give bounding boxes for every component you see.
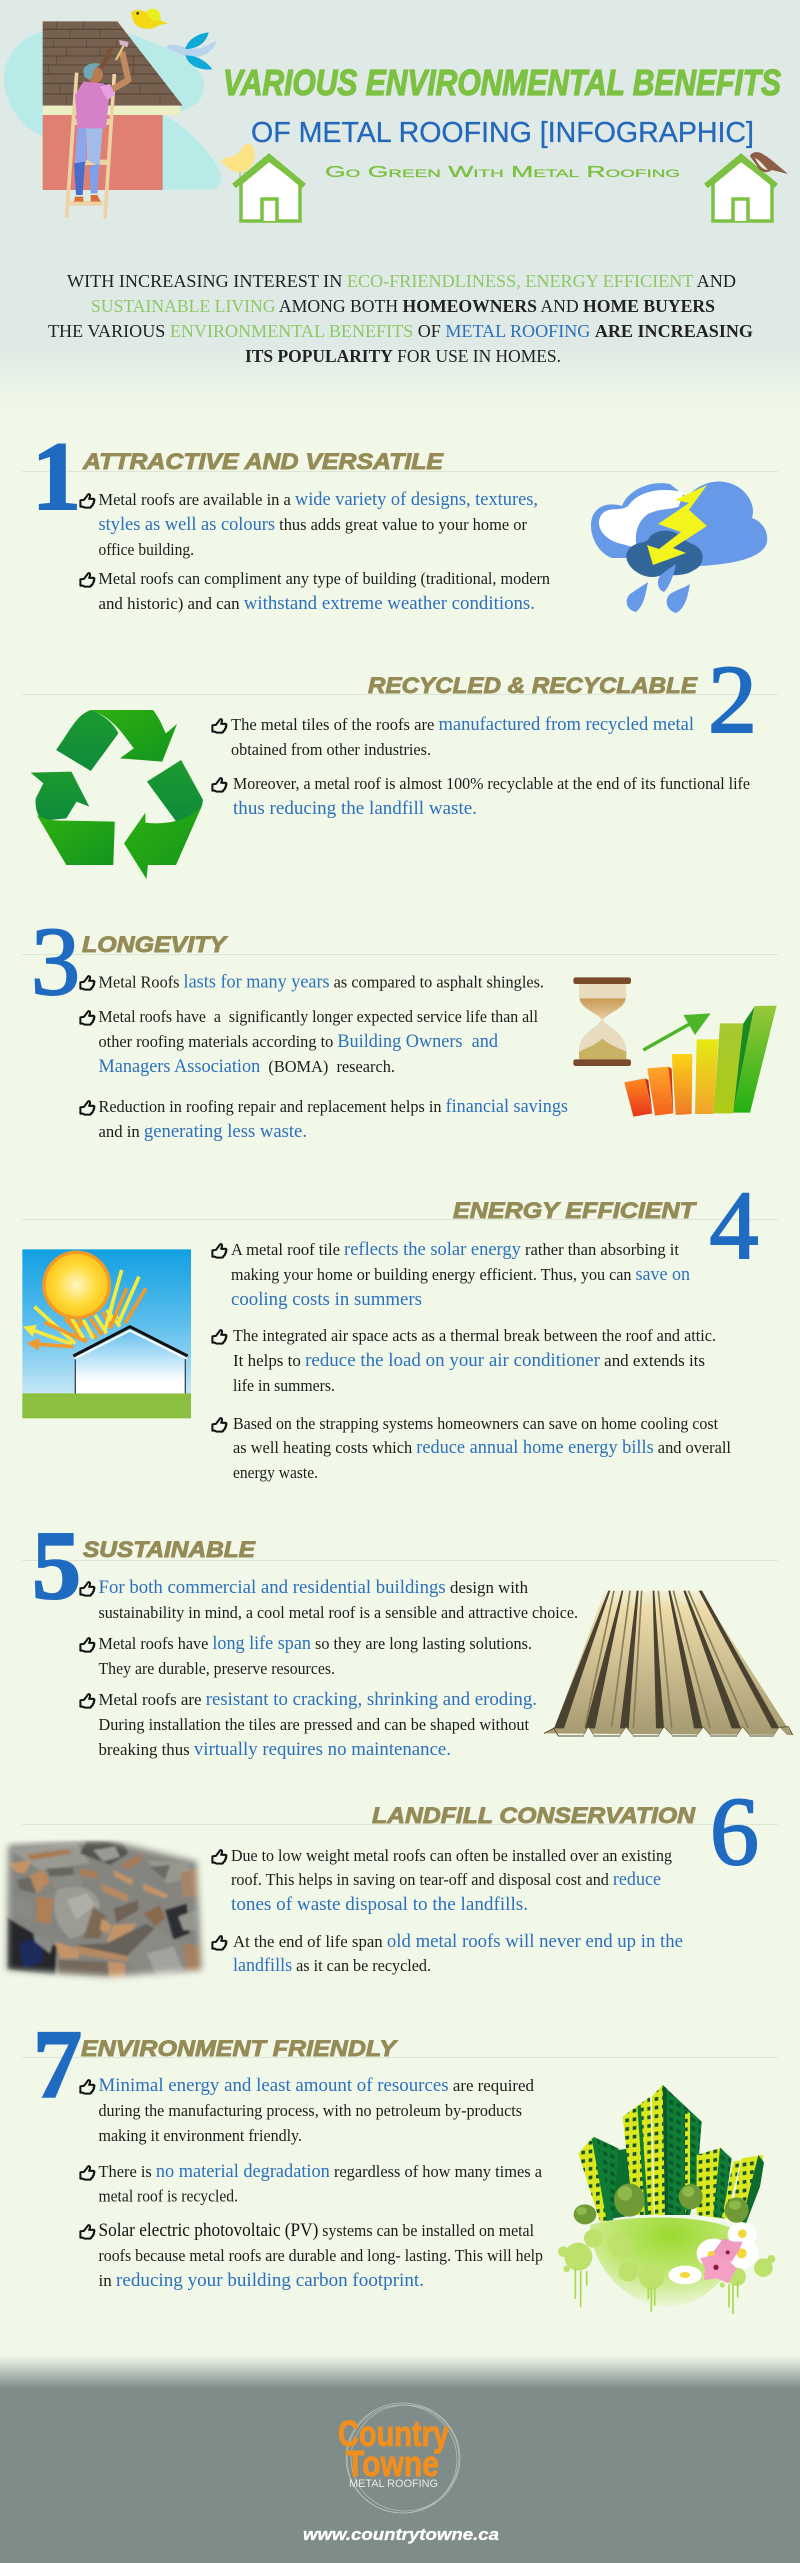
bullet point: roof. This helps in saving on tear-off and disposal cost and reduce <box>231 1869 661 1890</box>
bullet point <box>80 1096 568 1142</box>
bullet point: landfills as it can be recycled. <box>233 1955 431 1976</box>
bullet point: Metal roofs are available in a wide variety of designs, textures, <box>98 489 538 510</box>
icon: sun reflecting off house roof <box>22 1249 191 1418</box>
bullet point <box>212 1414 731 1482</box>
icon: blue bird <box>167 32 217 70</box>
number 2: 2 <box>708 646 757 754</box>
bullet point: Metal Roofs lasts for many years as compared to asphalt shingles. <box>98 972 544 992</box>
icon: recycling arrows <box>31 710 203 879</box>
heading: RECYCLED & RECYCLABLE <box>368 673 698 698</box>
bullet point: Moreover, a metal roof is almost 100% recyclable at the end of its functional life <box>233 774 750 793</box>
bullet point: Solar electric photovoltaic (PV) systems can be installed on metal <box>98 2221 534 2241</box>
icon: yellow bird <box>131 9 168 29</box>
bullet point: For both commercial and residential buildings design with <box>98 1577 528 1598</box>
bullet point: obtained from other industries. <box>231 740 431 759</box>
image: corrugated metal roof sheet <box>544 1591 793 1736</box>
bullet point: Managers Association (BOMA) research. <box>98 1056 395 1077</box>
subtitle: OF METAL ROOFING [INFOGRAPHIC] <box>251 117 754 149</box>
number 7: 7 <box>33 2011 82 2119</box>
bullet point <box>212 1931 683 1976</box>
logo: Country Towne Metal Roofing: Towne <box>346 2443 439 2484</box>
intro text: SUSTAINABLE LIVING AMONG BOTH HOMEOWNERS AND HOME BUYERS <box>91 296 715 316</box>
panel: section 4 energy efficient <box>22 1172 778 1482</box>
logo: Country Towne Metal Roofing: Country <box>338 2413 449 2454</box>
intro text: WITH INCREASING INTEREST IN ECO-FRIENDLINESS, ENERGY EFFICIENT AND <box>67 271 736 291</box>
heading: SUSTAINABLE <box>83 1537 256 1562</box>
panel: section 1 attractive and versatile <box>22 423 778 614</box>
bullet point <box>212 1239 690 1310</box>
bullet point: At the end of life span old metal roofs will never end up in the <box>233 1931 683 1952</box>
heading: LANDFILL CONSERVATION <box>372 1803 696 1828</box>
bullet point: thus reducing the landfill waste. <box>233 798 477 819</box>
bullet point: life in summers. <box>233 1376 335 1395</box>
bullet point: Metal roofs can compliment any type of building (traditional, modern <box>98 569 550 588</box>
bullet point: and in generating less waste. <box>98 1121 307 1142</box>
panel: section 5 sustainable <box>22 1512 793 1760</box>
bullet point: roofs because metal roofs are durable and long- lasting. This will help <box>98 2246 543 2265</box>
bullet point <box>212 1846 672 1915</box>
panel: section 2 recycled and recyclable <box>22 646 778 879</box>
number 3: 3 <box>31 908 80 1016</box>
bullet point: Due to low weight metal roofs can often be installed over an existing <box>231 1846 672 1865</box>
logo: Country Towne Metal Roofing: METAL ROOFING <box>349 2478 438 2490</box>
bullet point <box>80 2161 542 2206</box>
icon: storm cloud <box>591 481 767 613</box>
number 6: 6 <box>710 1778 759 1886</box>
bullet point <box>212 774 750 819</box>
icon: hourglass and rising bar chart <box>573 977 777 1117</box>
heading: ENERGY EFFICIENT <box>453 1198 697 1223</box>
tagline: Go Green With Metal Roofing <box>325 164 680 181</box>
bullet point: making your home or building energy efficient. Thus, you can save on <box>231 1264 690 1285</box>
icon: right green house <box>706 157 776 221</box>
bullet point <box>80 489 538 559</box>
image: pile of scrap metal <box>0 1840 213 1987</box>
bullet point: The metal tiles of the roofs are manufactured from recycled metal <box>231 714 694 735</box>
bullet point: as well heating costs which reduce annual home energy bills and overall <box>233 1437 731 1458</box>
bullet point: during the manufacturing process, with no petroleum by-products <box>98 2101 522 2120</box>
bullet point <box>80 1577 578 1622</box>
bullet point: It helps to reduce the load on your air conditioner and extends its <box>233 1350 705 1371</box>
heading: ATTRACTIVE AND VERSATILE <box>82 449 444 474</box>
icon: green city on globe with flowers <box>558 2085 775 2313</box>
bullet point: making it environment friendly. <box>98 2126 302 2145</box>
panel: section 3 longevity <box>22 908 778 1142</box>
bullet point: During installation the tiles are pressed and can be shaped without <box>98 1715 529 1734</box>
icon: pale yellow bird <box>221 144 255 178</box>
bullet point: energy waste. <box>233 1463 318 1482</box>
bullet point: Minimal energy and least amount of resources are required <box>98 2075 534 2096</box>
bullet point: Metal roofs have long life span so they are long lasting solutions. <box>98 1633 532 1654</box>
bullet point: tones of waste disposal to the landfills. <box>231 1894 528 1915</box>
bullet point: They are durable, preserve resources. <box>98 1659 335 1678</box>
bullet point: Based on the strapping systems homeowners can save on home cooling cost <box>233 1414 718 1433</box>
bullet point <box>80 1007 538 1077</box>
website url: www.countrytowne.ca <box>303 2525 499 2544</box>
panel: footer <box>303 2396 499 2544</box>
number 5: 5 <box>32 1512 81 1620</box>
bullet point <box>212 714 694 759</box>
intro text: ITS POPULARITY FOR USE IN HOMES. <box>245 346 561 366</box>
illustration: roofer on ladder with birds <box>4 9 221 218</box>
bullet point: The integrated air space acts as a thermal break between the roof and attic. <box>233 1326 716 1345</box>
icon: left green house <box>234 157 304 221</box>
bullet point: in reducing your building carbon footprint. <box>98 2270 424 2291</box>
bullet point <box>80 2221 543 2291</box>
panel: section 6 landfill conservation <box>2 1798 778 1982</box>
bullet point: breaking thus virtually requires no maintenance. <box>98 1739 451 1760</box>
number 4: 4 <box>710 1172 758 1280</box>
bullet point: A metal roof tile reflects the solar energy rather than absorbing it <box>231 1239 679 1260</box>
heading: ENVIRONMENT FRIENDLY <box>81 2036 399 2061</box>
bullet point <box>80 1689 537 1760</box>
bullet point: cooling costs in summers <box>231 1289 422 1310</box>
bullet point: sustainability in mind, a cool metal roof is a sensible and attractive choice. <box>98 1603 578 1622</box>
icon: sparrow <box>750 152 788 174</box>
bullet point: There is no material degradation regardless of how many times a <box>98 2161 542 2182</box>
logo: Country Towne Metal Roofing <box>338 2396 467 2520</box>
bullet point <box>80 569 550 614</box>
heading: LONGEVITY <box>82 932 229 957</box>
bullet point: metal roof is recycled. <box>98 2186 238 2206</box>
intro text <box>48 271 753 366</box>
bullet point <box>80 2075 534 2145</box>
bullet point: and historic) and can withstand extreme weather conditions. <box>98 593 535 614</box>
bullet point: styles as well as colours thus adds great value to your home or <box>98 514 527 535</box>
flowers <box>668 2222 759 2284</box>
number 1: 1 <box>32 423 81 531</box>
bullet point: Metal roofs are resistant to cracking, shrinking and eroding. <box>98 1689 537 1710</box>
panel: section 7 environment friendly <box>22 2011 778 2313</box>
bullet point <box>80 1633 532 1678</box>
bullet point: other roofing materials according to Building Owners and <box>98 1031 498 1052</box>
bullet point <box>212 1326 716 1395</box>
bullet point: Reduction in roofing repair and replacement helps in financial savings <box>98 1096 568 1117</box>
bullet point: office building. <box>98 540 194 559</box>
intro text: THE VARIOUS ENVIRONMENTAL BENEFITS OF METAL ROOFING ARE INCREASING <box>48 321 753 341</box>
bullet point: Metal roofs have a significantly longer expected service life than all <box>98 1007 538 1026</box>
